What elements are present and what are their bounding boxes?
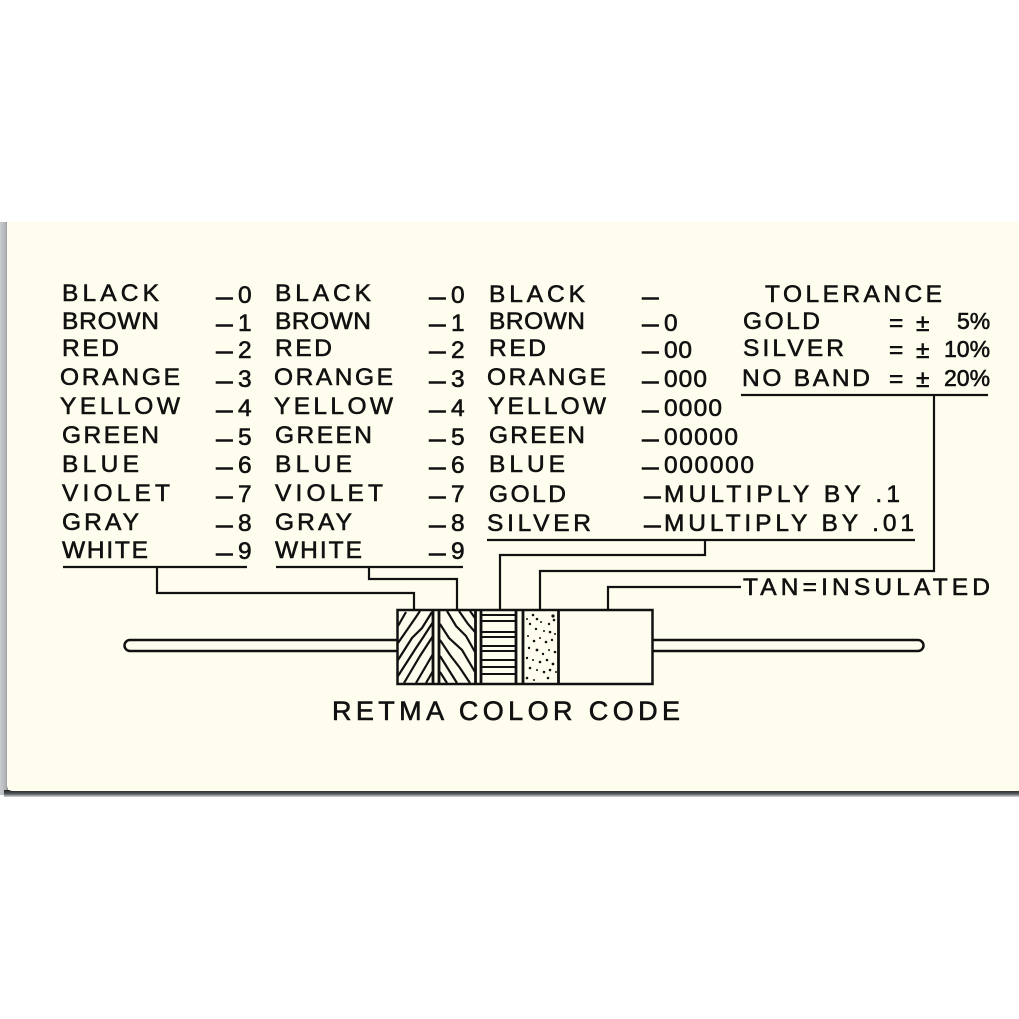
color list: second significant digit: ORANGE: [274, 364, 393, 391]
color list: second significant digit: GREEN: [275, 422, 372, 449]
color list: first significant digit: –: [216, 536, 233, 569]
color list: second significant digit: –: [429, 364, 446, 397]
color list: first significant digit: 6: [238, 452, 252, 479]
color list: second significant digit: 3: [451, 366, 465, 393]
tolerance table: GOLD: [743, 308, 820, 335]
band 3: horizontal lines: [481, 610, 523, 684]
color list: multiplier: –: [644, 479, 661, 512]
color list: first significant digit: 7: [238, 481, 252, 508]
tolerance table: NO BAND: [742, 365, 870, 392]
tolerance table: SILVER: [743, 335, 844, 362]
card: cream background with scan shadow: [0, 222, 1019, 797]
color list: multiplier: –: [642, 450, 659, 483]
color list: multiplier: BROWN: [489, 308, 585, 335]
color list: first significant digit: 2: [238, 337, 252, 364]
color list: first significant digit: –: [216, 364, 233, 397]
color list: multiplier: –: [644, 508, 661, 541]
color list: second significant digit: 4: [451, 395, 465, 422]
color list: first significant digit: –: [216, 422, 233, 455]
color list: first significant digit: GRAY: [62, 509, 139, 536]
color list: multiplier: 00: [664, 337, 692, 364]
leader lines from lists to resistor bands: [63, 395, 988, 610]
tolerance table: ±: [916, 366, 929, 393]
tolerance table: ±: [916, 310, 929, 337]
color list: multiplier: –: [642, 307, 659, 340]
color list: multiplier: GREEN: [489, 422, 585, 449]
color list: first significant digit: VIOLET: [62, 480, 170, 507]
color list: multiplier: ORANGE: [487, 364, 606, 391]
color list: first significant digit: YELLOW: [60, 393, 181, 420]
color list: multiplier: YELLOW: [488, 393, 607, 420]
color list: multiplier: –: [642, 422, 659, 455]
color list: first significant digit: –: [216, 307, 233, 340]
color list: first significant digit: 5: [238, 424, 252, 451]
color list: first significant digit: 9: [238, 538, 252, 565]
color list: multiplier: SILVER: [487, 510, 591, 537]
tolerance table: 20%: [944, 365, 990, 391]
color list: second significant digit: 5: [451, 424, 465, 451]
color list: second significant digit: WHITE: [275, 537, 362, 564]
left lead: [124, 640, 397, 651]
color list: multiplier: MULTIPLY BY .1: [664, 481, 900, 508]
label: tan insulated: TAN=INSULATED: [743, 574, 990, 601]
color list: second significant digit: 2: [451, 337, 465, 364]
color list: multiplier: GOLD: [489, 481, 566, 508]
color list: second significant digit: YELLOW: [274, 393, 394, 420]
color list: second significant digit: GRAY: [275, 509, 352, 536]
color list: first significant digit: 3: [238, 366, 252, 393]
color list: first significant digit: BROWN: [62, 308, 159, 335]
color list: first significant digit: [60, 280, 252, 569]
color list: first significant digit: RED: [62, 335, 119, 362]
tolerance table: =: [889, 366, 903, 393]
color list: multiplier: 00000: [664, 424, 738, 451]
color list: second significant digit: –: [429, 307, 446, 340]
tolerance table: =: [889, 310, 903, 337]
band 2: reverse diagonal hatch: [440, 610, 481, 684]
color list: first significant digit: BLACK: [62, 280, 160, 307]
color list: multiplier: 000: [664, 366, 707, 393]
color list: first significant digit: 0: [238, 282, 252, 309]
tolerance table: TOLERANCE: [765, 281, 942, 308]
color list: first significant digit: BLUE: [62, 451, 139, 478]
color list: second significant digit: 9: [451, 538, 465, 565]
color list: second significant digit: BLACK: [275, 280, 372, 307]
tolerance table: ±: [916, 337, 929, 364]
tolerance table: =: [889, 337, 903, 364]
color list: multiplier: BLACK: [489, 281, 586, 308]
color list: second significant digit: –: [429, 479, 446, 512]
color list: second significant digit: [274, 280, 465, 569]
color list: first significant digit: –: [216, 508, 233, 541]
color list: second significant digit: BROWN: [275, 308, 371, 335]
color list: second significant digit: –: [429, 280, 446, 313]
color list: first significant digit: –: [216, 334, 233, 367]
color list: second significant digit: 8: [451, 510, 465, 537]
tolerance table: 10%: [944, 336, 990, 362]
title: RETMA COLOR CODE: [332, 696, 680, 726]
band 4: stipple: [526, 610, 558, 684]
resistor body: [398, 610, 652, 684]
color list: first significant digit: ORANGE: [60, 364, 180, 391]
color list: second significant digit: BLUE: [275, 451, 352, 478]
color list: multiplier: MULTIPLY BY .01: [664, 510, 914, 537]
color list: first significant digit: 1: [238, 310, 252, 337]
color list: second significant digit: –: [429, 334, 446, 367]
color list: first significant digit: –: [216, 280, 233, 313]
color list: second significant digit: –: [429, 508, 446, 541]
band 1: diagonal hatch: [398, 610, 439, 684]
color list: second significant digit: –: [429, 393, 446, 426]
color list: second significant digit: 0: [451, 282, 465, 309]
color list: multiplier: –: [642, 334, 659, 367]
color list: multiplier: –: [642, 364, 659, 397]
resistor diagram: [124, 610, 924, 684]
color list: second significant digit: RED: [275, 335, 332, 362]
right lead: [653, 640, 924, 651]
color list: first significant digit: –: [216, 393, 233, 426]
tolerance table: 5%: [957, 308, 990, 334]
color list: second significant digit: 7: [451, 481, 465, 508]
color list: second significant digit: VIOLET: [275, 480, 383, 507]
color list: second significant digit: 6: [451, 452, 465, 479]
tolerance table: [742, 281, 990, 393]
color list: multiplier: 0000: [664, 395, 722, 422]
color list: first significant digit: GREEN: [62, 422, 159, 449]
color list: first significant digit: 4: [238, 395, 252, 422]
color list: multiplier: RED: [489, 335, 546, 362]
color list: multiplier: –: [642, 393, 659, 426]
color list: second significant digit: –: [429, 422, 446, 455]
color list: second significant digit: 1: [451, 310, 465, 337]
color list: multiplier: 0: [664, 310, 678, 337]
color list: multiplier: BLUE: [489, 451, 565, 478]
color list: first significant digit: WHITE: [62, 537, 148, 564]
color list: first significant digit: –: [216, 479, 233, 512]
color list: first significant digit: –: [216, 450, 233, 483]
color list: multiplier: 000000: [664, 452, 754, 479]
color list: second significant digit: –: [429, 536, 446, 569]
color list: second significant digit: –: [429, 450, 446, 483]
color list: multiplier: –: [642, 280, 659, 313]
color list: first significant digit: 8: [238, 510, 252, 537]
color list: multiplier: [487, 280, 914, 541]
